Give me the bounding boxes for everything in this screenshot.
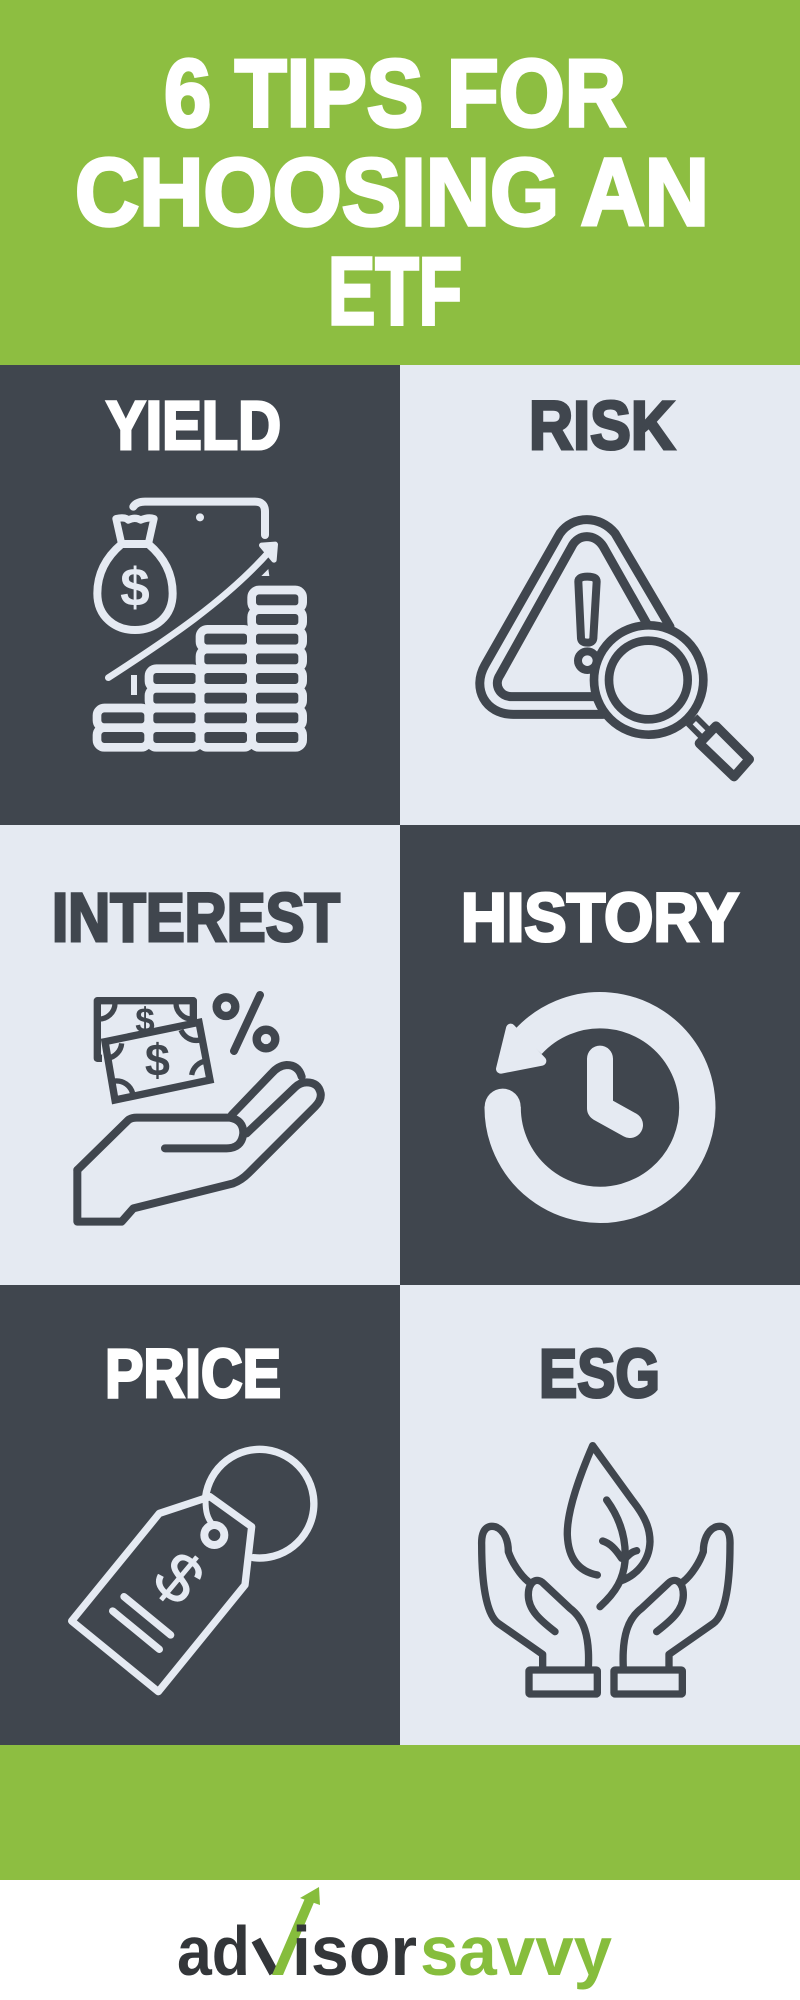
bottom green band [0,1745,800,1880]
panel: interest [0,825,400,1285]
logo: advisorsavvy: ad [177,1912,250,1990]
icon: price tag with ring: $ [140,1537,218,1619]
logo: advisorsavvy: savvy [420,1912,612,1990]
icon: hand holding money and percent: $ [135,1001,155,1040]
title: CHOOSING AN [75,139,709,246]
icon: hand holding money and percent: $ [145,1034,170,1085]
title [75,40,709,345]
panel: yield [0,365,400,825]
heading: interest: INTEREST [52,879,340,956]
logo: advisorsavvy [177,1887,612,1990]
icon: hand holding money and percent [77,995,321,1222]
heading: yield: YIELD [106,387,281,464]
panel: esg [400,1285,800,1745]
title: ETF [328,238,462,345]
heading: history: HISTORY [461,879,739,956]
heading: price: PRICE [105,1335,281,1412]
panel: risk [400,365,800,825]
icon: clock with counter-clockwise arrow [485,1010,697,1205]
heading: risk: RISK [529,387,675,464]
icon: money bag and rising coin stacks: $ [120,559,150,618]
icon: price tag with ring [72,1449,314,1692]
panel: history [400,825,800,1285]
panel: price [0,1285,400,1745]
title banner [0,0,800,365]
title: 6 TIPS FOR [164,40,626,147]
icon: money bag and rising coin stacks [97,502,303,747]
logo: advisorsavvy: isor [292,1912,417,1990]
icon: hands cradling a leaf [482,1446,730,1694]
icon: warning triangle with magnifier [480,520,749,777]
heading: esg: ESG [539,1335,660,1412]
